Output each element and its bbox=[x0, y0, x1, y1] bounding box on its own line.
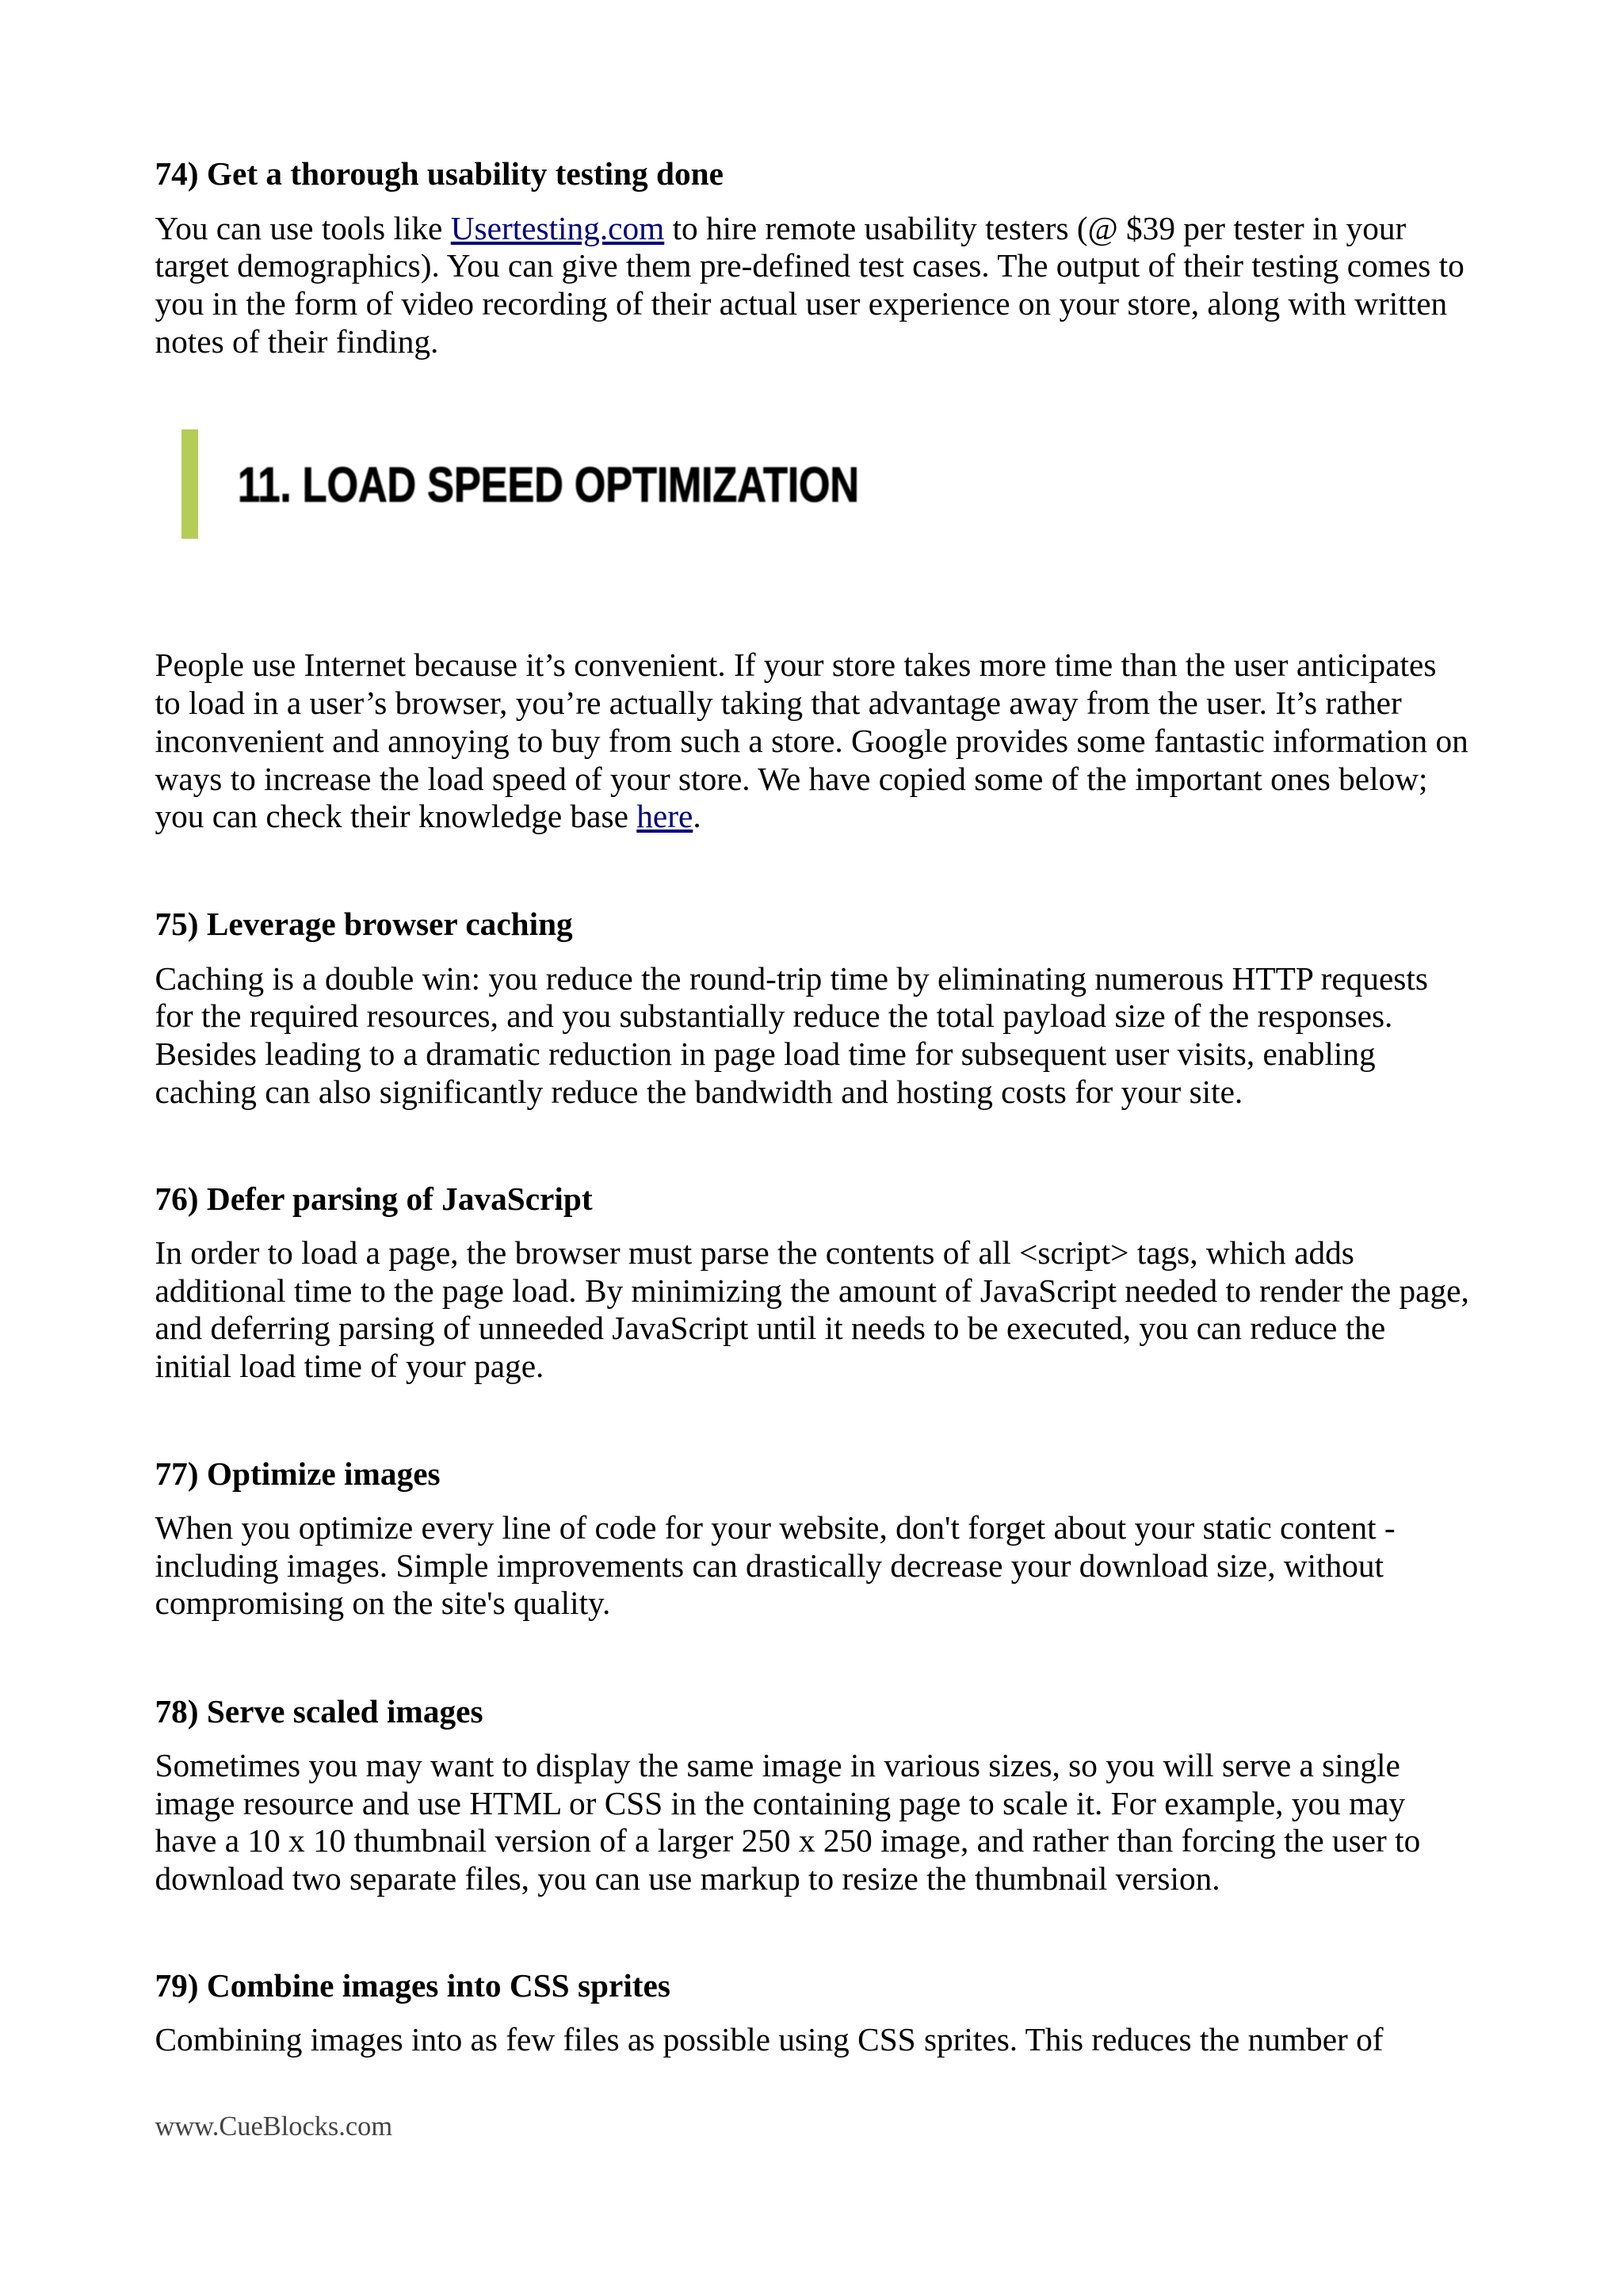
text block: 75 body bbox=[155, 960, 1428, 1110]
text block: 78 body: image resource and use HTML or CSS in the containing page to scale it. For example, you may bbox=[155, 1785, 1405, 1821]
text block: section intro: you can check their knowledge base here. bbox=[155, 798, 701, 834]
section banner: 11 load speed optimization bbox=[181, 429, 859, 539]
text block: 77 body bbox=[155, 1509, 1396, 1621]
accent bar bbox=[181, 429, 198, 539]
text block: 77 body: including images. Simple improvements can drastically decrease your download size, without bbox=[155, 1547, 1384, 1584]
text block: 76 body: and deferring parsing of unneeded JavaScript until it needs to be executed, you can reduce the bbox=[155, 1310, 1385, 1346]
text block: 75 body: Besides leading to a dramatic reduction in page load time for subsequent user visits, enabling bbox=[155, 1035, 1376, 1072]
text block: 75 body: Caching is a double win: you reduce the round-trip time by eliminating numerous HTTP requests bbox=[155, 960, 1428, 997]
text block: 78 body: download two separate files, you can use markup to resize the thumbnail version. bbox=[155, 1860, 1220, 1897]
text block: 76 body bbox=[155, 1234, 1469, 1384]
heading: 75 browser caching: 75) Leverage browser caching bbox=[155, 905, 573, 941]
text block: 78 body bbox=[155, 1747, 1420, 1897]
text block: 74 body bbox=[155, 210, 1465, 360]
text block: 76 body: additional time to the page load. By minimizing the amount of JavaScript needed to render the page, bbox=[155, 1272, 1469, 1309]
text block: section intro bbox=[155, 646, 1468, 834]
text block: 79 body: Combining images into as few files as possible using CSS sprites. This reduces the number of bbox=[155, 2021, 1384, 2058]
text block: 75 body: for the required resources, and you substantially reduce the total payload size of the responses. bbox=[155, 997, 1392, 1034]
text block: 76 body: initial load time of your page. bbox=[155, 1348, 544, 1384]
text block: section intro: People use Internet because it’s convenient. If your store takes more time than the user anticipates bbox=[155, 646, 1436, 683]
text block: section intro: inconvenient and annoying to buy from such a store. Google provides some fantastic information on bbox=[155, 723, 1468, 759]
text block: 78 body: Sometimes you may want to display the same image in various sizes, so you will serve a single bbox=[155, 1747, 1400, 1783]
heading: 77 optimize images: 77) Optimize images bbox=[155, 1455, 441, 1492]
text block: section intro: ways to increase the load speed of your store. We have copied some of the important ones below; bbox=[155, 761, 1428, 797]
text block: 77 body: When you optimize every line of code for your website, don't forget about your static content - bbox=[155, 1509, 1396, 1546]
text block: 77 body: compromising on the site's quality. bbox=[155, 1585, 610, 1621]
text block: 76 body: In order to load a page, the browser must parse the contents of all <script> tags, which adds bbox=[155, 1234, 1354, 1271]
heading: 76 defer javascript: 76) Defer parsing of JavaScript bbox=[155, 1180, 593, 1217]
text block: 74 body: target demographics). You can give them pre-defined test cases. The output of their testing comes to bbox=[155, 247, 1465, 284]
text block: 74 body: notes of their finding. bbox=[155, 323, 438, 360]
footer url: www.CueBlocks.com bbox=[155, 2111, 392, 2142]
heading: 79 css sprites: 79) Combine images into CSS sprites bbox=[155, 1967, 670, 2004]
text block: 74 body: You can use tools like Usertesting.com to hire remote usability testers (@ $39 per tester in your bbox=[155, 210, 1406, 246]
text block: 74 body: you in the form of video recording of their actual user experience on your store, along with written bbox=[155, 285, 1447, 322]
text block: 78 body: have a 10 x 10 thumbnail version of a larger 250 x 250 image, and rather than forcing the user to bbox=[155, 1822, 1420, 1859]
heading: 78 scaled images: 78) Serve scaled images bbox=[155, 1693, 483, 1730]
text block: section intro: to load in a user’s browser, you’re actually taking that advantage away from the user. It’s rather bbox=[155, 685, 1402, 721]
text block: 75 body: caching can also significantly reduce the bandwidth and hosting costs for your site. bbox=[155, 1074, 1243, 1110]
heading: 74 usability testing: 74) Get a thorough usability testing done bbox=[155, 155, 724, 192]
